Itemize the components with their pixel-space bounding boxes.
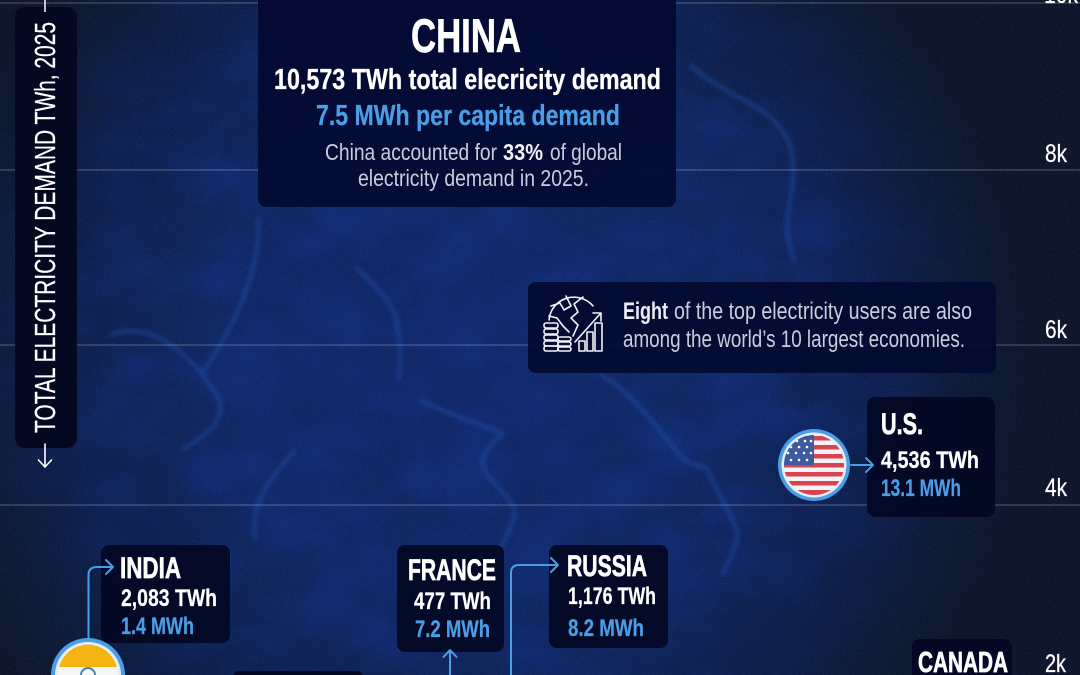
chart grid lines [0, 3, 1080, 505]
panel: Russia: 8.2 MWh [568, 615, 644, 642]
China total demand: 10,573 TWh total elecricity demand [274, 64, 661, 96]
China heading: CHINA [411, 9, 521, 62]
panel: India: 2,083 TWh [121, 585, 217, 612]
panel: China [258, 0, 676, 207]
panel: Canada, cropped at bottom edge [912, 639, 1012, 675]
panel: Russia: 1,176 TWh [568, 583, 656, 610]
panel: France [397, 545, 504, 652]
y-axis tick labels [1044, 0, 1078, 675]
arrow: India flag to panel [88, 560, 113, 640]
panel: Russia: RUSSIA [567, 550, 647, 583]
panel: U.S.: U.S. [881, 408, 923, 441]
panel: Russia [549, 545, 668, 648]
arrow: y-axis direction [38, 444, 52, 467]
callout text [623, 298, 972, 353]
arrow: up and right to Russia panel [511, 558, 558, 675]
panel: India [101, 545, 230, 643]
icon: globe, coins and rising bars [544, 296, 602, 351]
panel: U.S.: 4,536 TWh [881, 447, 979, 474]
y-axis title pill [15, 0, 77, 448]
arrow: U.S. flag to panel [851, 458, 873, 472]
China note: electricity demand in 2025. [358, 165, 589, 191]
panel: India: 1.4 MWh [121, 613, 194, 640]
callout text: of the top electricity users are also [674, 298, 972, 325]
callout text: among the world’s 10 largest economies. [623, 326, 965, 353]
panel: France: FRANCE [408, 554, 496, 587]
China per capita demand: 7.5 MWh per capita demand [316, 100, 620, 132]
callout text: Eight [623, 298, 668, 325]
y-axis tick labels: 8k [1045, 140, 1067, 168]
panel: India: INDIA [120, 552, 181, 585]
panel: next country, cropped at bottom edge [233, 671, 363, 675]
panel: U.S.: 13.1 MWh [881, 475, 961, 502]
icon: U.S. flag [778, 429, 850, 501]
China note: 33% [503, 139, 543, 165]
y-axis tick labels: 6k [1045, 316, 1067, 344]
arrow: up to France panel [444, 650, 456, 675]
callout: top users and largest economies [528, 282, 996, 373]
y-axis tick labels: 4k [1045, 474, 1067, 502]
China note: China accounted for [325, 139, 497, 165]
panel: France: 477 TWh [414, 588, 491, 615]
China note: of global [550, 139, 622, 165]
China note [325, 139, 622, 191]
icon: India flag [51, 638, 125, 675]
panel: U.S. [867, 397, 995, 517]
panel: France: 7.2 MWh [415, 616, 490, 643]
